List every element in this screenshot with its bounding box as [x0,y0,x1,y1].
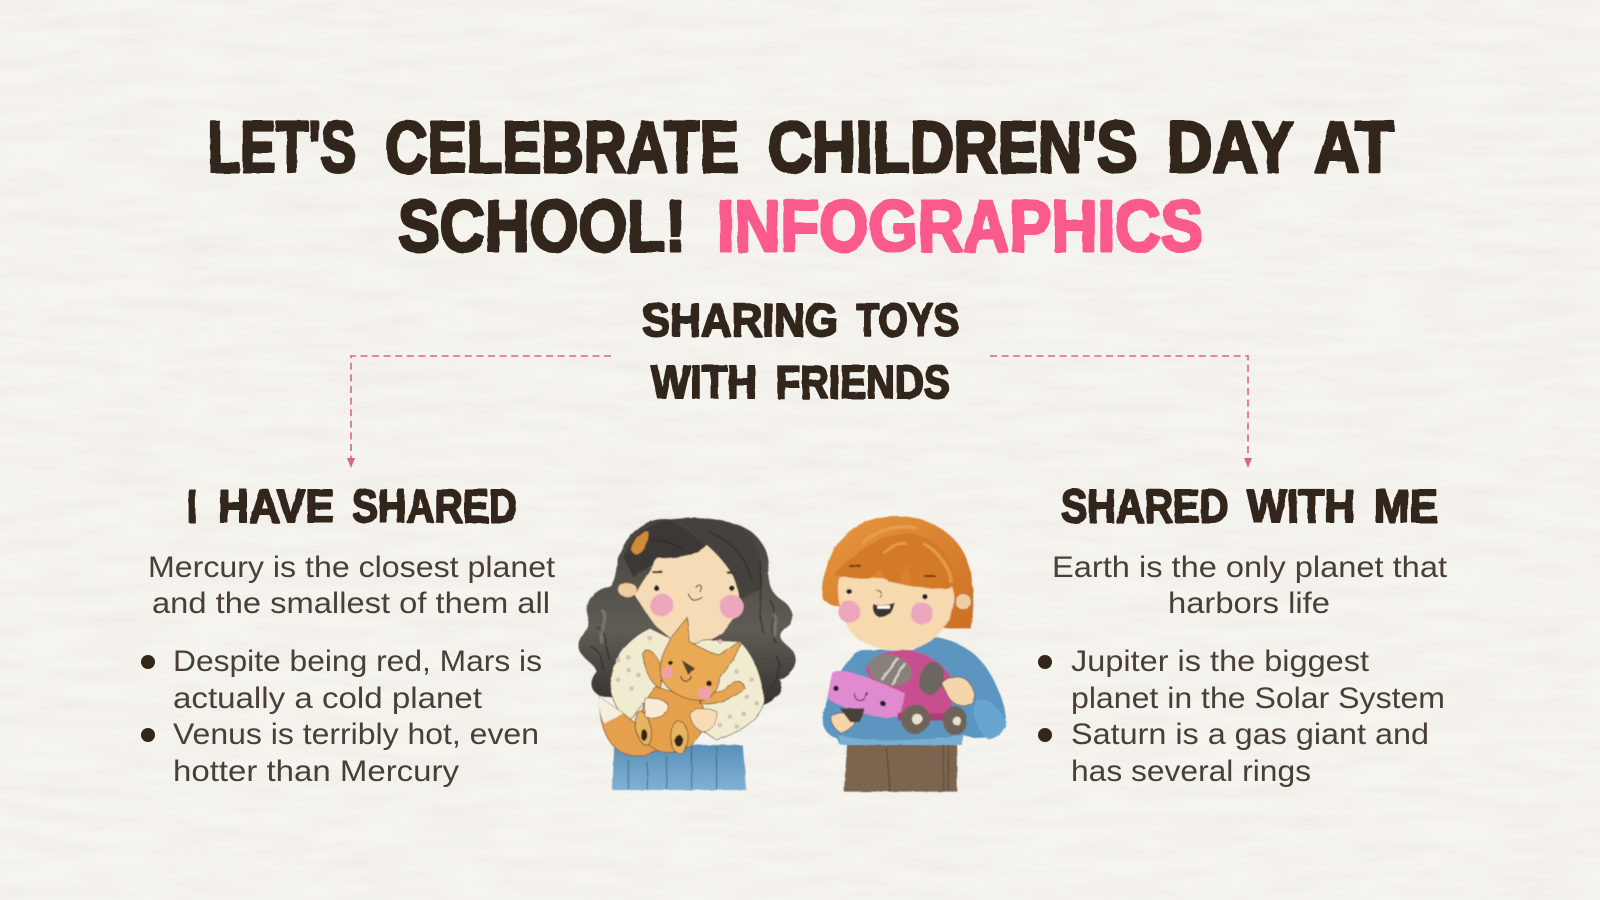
blouse [611,628,764,740]
brows [850,566,935,576]
heading: shared with me: ME [1374,480,1438,532]
heading: shared with me [1061,480,1438,532]
central heading: sharing toys with friends: WITH [651,356,757,408]
cheeks [838,601,860,623]
title: INFOGRAPHICS [717,187,1203,267]
title: SCHOOL! [398,187,686,267]
hair [578,518,796,705]
bullet list: Jupiter and Saturn: Jupiter is the biggest [1071,645,1370,678]
illustration: boy holding toy car [822,516,1006,792]
title: LET'S [208,108,356,188]
bullet list: Mars and Venus: Venus is terribly hot, even [173,718,539,751]
arrow: dashed connector to left column [347,356,611,468]
bullet list: Jupiter and Saturn: planet in the Solar System [1071,682,1445,715]
heading: shared with me: SHARED [1061,480,1228,532]
bullet list: Mars and Venus: hotter than Mercury [173,755,459,788]
title: AT [1314,108,1394,188]
bullet list: Jupiter and Saturn [1038,645,1445,788]
face [838,577,954,650]
bullet list: Jupiter and Saturn: Saturn is a gas giant and [1071,718,1429,751]
heading: shared with me: WITH [1247,480,1355,532]
heading: I have shared [187,480,517,532]
hair fringe [833,533,957,588]
fox paws [633,710,654,747]
cheeks [650,593,673,617]
text block: Earth description [1052,551,1448,620]
right column: shared with me [1038,480,1448,788]
central heading: sharing toys with friends: FRIENDS [776,356,950,408]
ear [955,594,971,610]
hair clip [631,531,649,555]
hands [645,698,668,718]
fox body [641,687,705,752]
hair back [822,516,973,628]
blouse dots [616,636,759,729]
text block: Earth description: Earth is the only planet that [1052,551,1448,584]
hands [942,677,975,706]
bullet list: Mars and Venus [141,645,542,788]
neck and face [635,545,739,643]
arrow: dashed connector to right column [990,356,1252,468]
text block: Mercury description [148,551,556,620]
text block: Mercury description: Mercury is the closest planet [148,551,556,584]
heading: I have shared: SHARED [352,480,517,532]
left column: I have shared [141,480,556,788]
bullet list: Mars and Venus: Despite being red, Mars is [173,645,542,678]
text block: Mercury description: and the smallest of them all [152,587,550,620]
text block: Earth description: harbors life [1168,587,1330,620]
illustration: girl holding fox [578,518,796,790]
ear [618,583,637,597]
title: CELEBRATE [385,108,739,188]
bullet list: Mars and Venus: actually a cold planet [173,682,483,715]
central heading: sharing toys with friends: SHARING [642,294,838,346]
eyes and mouth [654,586,659,591]
central heading: sharing toys with friends: TOYS [856,294,959,346]
toy car [828,649,967,735]
bullet list: Jupiter and Saturn: has several rings [1071,755,1311,788]
skirt [612,745,747,790]
heading: I have shared: I [187,480,197,532]
fox head [660,617,742,701]
wheels [901,705,930,734]
fox arms [643,650,662,688]
sweater [823,636,1006,745]
title: DAY [1167,108,1294,188]
eyes [847,589,852,594]
heading: I have shared: HAVE [218,480,334,532]
title: CHILDREN'S [768,108,1137,188]
central heading: sharing toys with friends [642,294,959,408]
fox tail [600,697,657,756]
pants [844,742,957,792]
title [208,108,1394,267]
nose and mouth [876,591,882,597]
